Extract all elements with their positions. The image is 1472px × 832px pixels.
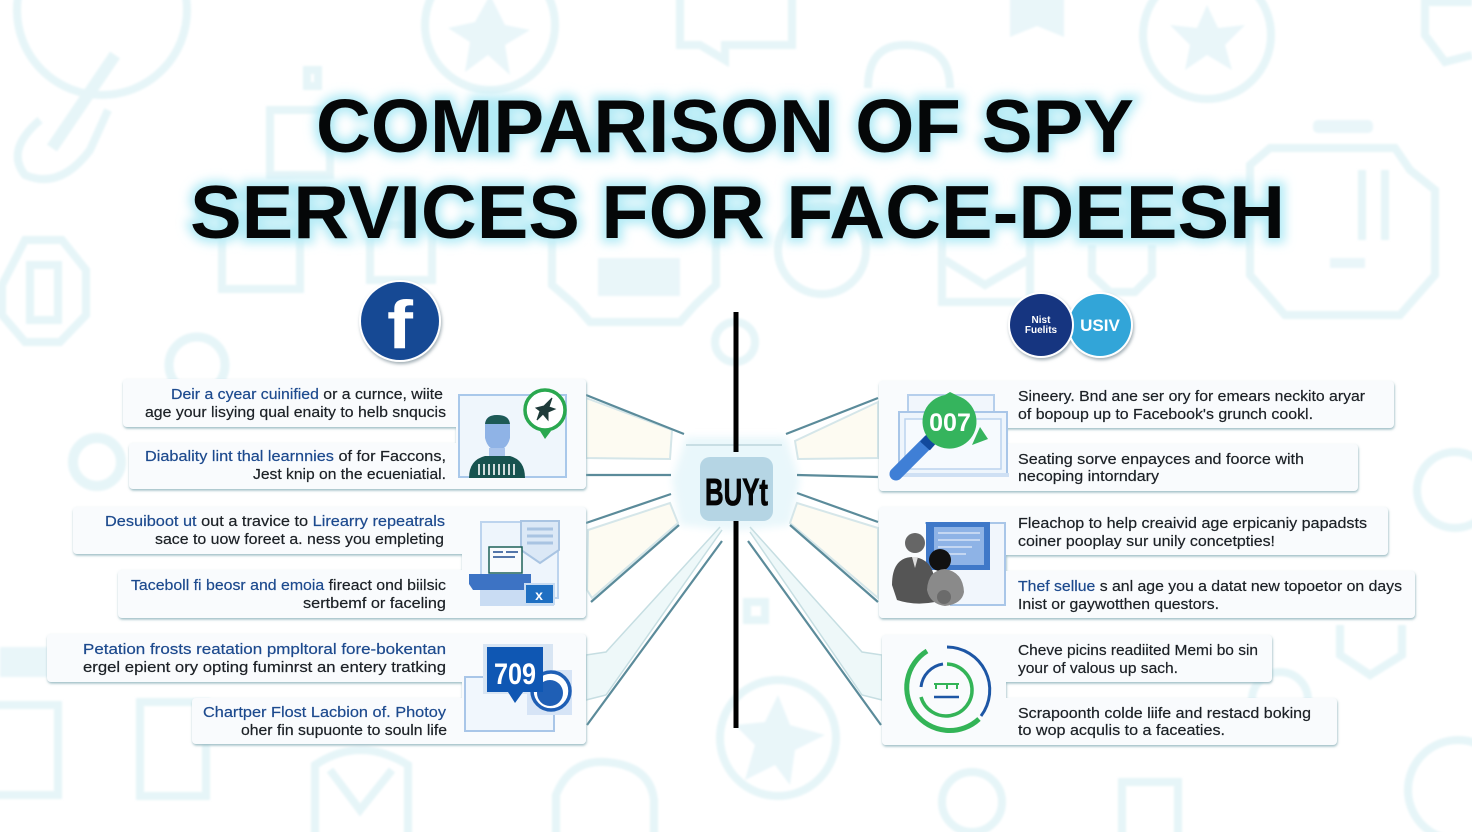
text: left item 1: [145, 386, 446, 421]
icon: two service badges: [1008, 292, 1133, 358]
central button: BUYt: BUYt: [705, 472, 768, 514]
text: left item 6: Chartper Flost Lacbion of. Photoy: [203, 704, 447, 721]
text: right item 2: Seating sorve enpayces and foorce with: [1018, 451, 1304, 468]
text: left item 3: [105, 513, 445, 548]
icon: laptop with magnifier 007: [893, 392, 1009, 477]
icon: documents and laptop: [469, 521, 559, 606]
title: SERVICES FOR FACE-DEESH: [190, 170, 1285, 254]
panel: right group 2: [879, 507, 1415, 618]
text: left item 2: [145, 448, 446, 483]
text: left item 4: Taceboll fi beosr and emoia fireact ond biilsic: [131, 577, 447, 594]
text: right item 3: [1018, 515, 1367, 550]
text: right item 6: [1018, 705, 1311, 739]
title: COMPARISON OF SPY: [316, 84, 1134, 168]
icon: concentric progress rings: [907, 647, 990, 731]
text: right item 2: [1018, 451, 1304, 485]
text: right item 5: your of valous up sach.: [1018, 660, 1178, 677]
connectors: left side: [586, 395, 782, 725]
panel: right group 3: [882, 635, 1337, 745]
text: right item 4: Thef sellue s anl age you a datat new topoetor on days: [1018, 578, 1402, 595]
text: left item 2: Jest knip on the ecueniatial.: [253, 466, 446, 483]
icon: documents and laptop: x: [535, 587, 543, 603]
text: right item 1: of bopoup up to Facebook's grunch cookl.: [1018, 406, 1313, 423]
icon: two service badges: USIV: [1080, 316, 1120, 335]
central divider line: [734, 312, 738, 728]
text: left item 4: sertbemf or faceling: [303, 595, 446, 612]
text: left item 1: age your lisying qual enaity to helb snqucis: [145, 404, 446, 421]
icon: laptop with magnifier 007: 007: [929, 409, 971, 437]
text: left item 6: [203, 704, 447, 739]
text: left item 3: sace to uow foreet a. ness you empleting: [155, 531, 444, 548]
text: left item 6: oher fin supuonte to souln life: [241, 722, 447, 739]
connector hub glow: [672, 437, 800, 530]
icon: two service badges: Fuelits: [1025, 325, 1058, 336]
text: right item 5: [1018, 642, 1258, 677]
text: left item 5: ergel epient ory opting fuminrst an entery tratking: [83, 659, 446, 676]
text: left item 5: Petation frosts reatation pmpltoral fore-bokentan: [83, 641, 446, 658]
text: right item 6: Scrapoonth colde liife and restacd boking: [1018, 705, 1311, 722]
icon: people with document: [892, 522, 1005, 606]
icon: facebook logo: f: [387, 287, 413, 363]
central button: BUYt: [700, 457, 773, 521]
panel: left group 3: [47, 634, 586, 744]
title: COMPARISON OF SPY: [316, 84, 1134, 168]
text: right item 6: to wop acqulis to a faceaties.: [1018, 722, 1225, 739]
title: [190, 84, 1285, 254]
panel: left group 2: [73, 507, 586, 618]
icon: 709 speech bubble with dial: [465, 644, 572, 731]
text: left item 3: Desuiboot ut out a travice to Lirearry repeatrals: [105, 513, 445, 530]
text: right item 3: coiner pooplay sur unily concetpties!: [1018, 533, 1275, 550]
text: right item 1: Sineery. Bnd ane ser ory for emears neckito aryar: [1018, 388, 1365, 405]
panel: left group 1: [123, 379, 586, 489]
text: right item 5: Cheve picins readiited Memi bo sin: [1018, 642, 1258, 659]
text: right item 2: necoping intorndary: [1018, 468, 1160, 485]
icon: two service badges: Nist: [1032, 315, 1051, 326]
text: left item 4: [131, 577, 447, 612]
text: left item 2: Diabality lint thal learnnies of for Faccons,: [145, 448, 446, 465]
connectors: right side: [748, 398, 882, 725]
text: right item 4: [1018, 578, 1402, 613]
icon: agent with badge: [459, 390, 566, 478]
title: SERVICES FOR FACE-DEESH: [190, 170, 1285, 254]
text: right item 1: [1018, 388, 1365, 423]
text: left item 1: Deir a cyear cuinified or a curnce, wiite: [171, 386, 443, 403]
panel: right group 1: [879, 381, 1394, 491]
text: right item 3: Fleachop to help creaivid age erpicaniy papadsts: [1018, 515, 1367, 532]
text: right item 4: Inist or gaywotthen questors.: [1018, 596, 1219, 613]
icon: 709 speech bubble with dial: 709: [494, 658, 536, 691]
text: left item 5: [83, 641, 446, 676]
icon: facebook logo: [359, 280, 441, 363]
